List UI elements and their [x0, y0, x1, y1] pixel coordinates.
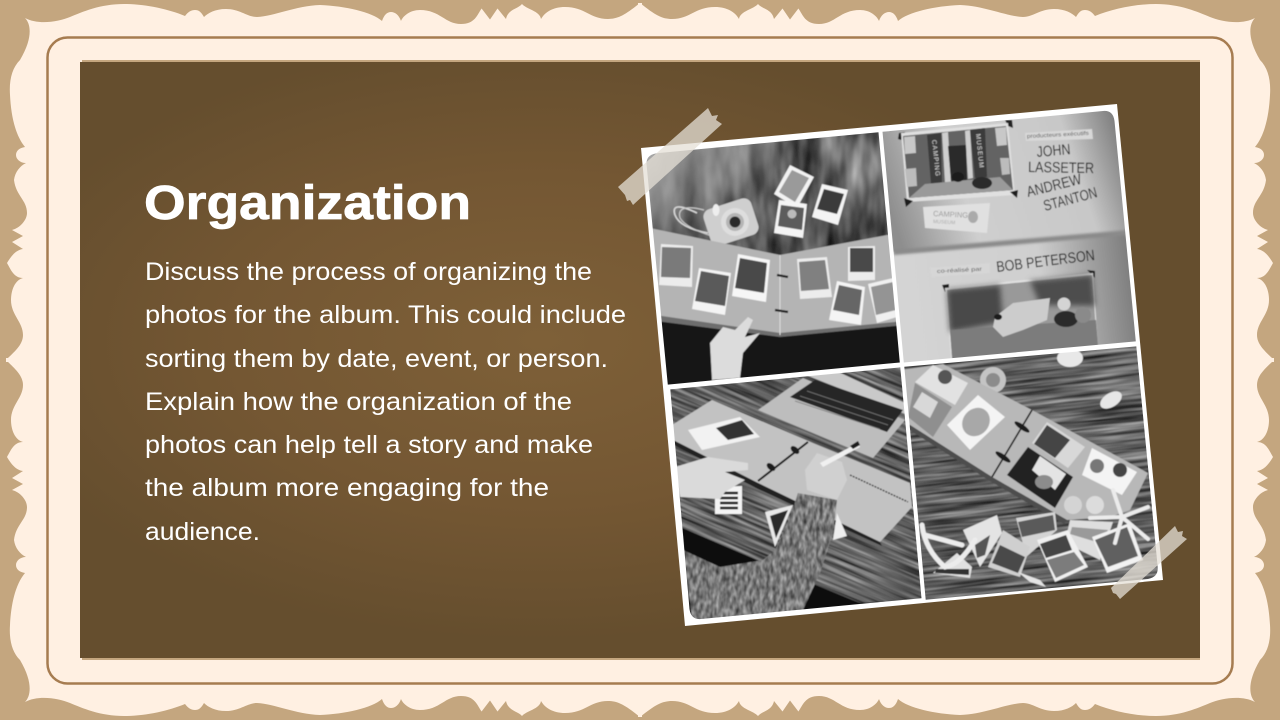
scattered seaside photos [933, 512, 1143, 587]
text block: body copy: sorting them by date, event, or person. [145, 345, 608, 373]
credits: executive producers: JOHN [1036, 141, 1071, 161]
anchor [922, 525, 975, 567]
photo: album with polaroids on fabric [646, 132, 900, 385]
label: camping museum tag: MUSEUM [933, 219, 955, 226]
credits: co-director: co-réalisé par [937, 267, 982, 275]
credits: co-director: BOB PETERSON [995, 247, 1096, 276]
label: camping museum tag [923, 203, 990, 233]
shells [980, 349, 1125, 412]
text block: body copy: Explain how the organization of the [145, 388, 572, 416]
text block: body copy: the album more engaging for the [145, 474, 549, 502]
tape: bottom right [1111, 526, 1187, 599]
credits: executive producers: STANTON [1042, 184, 1099, 215]
tape: top left [618, 108, 722, 205]
photo: open album on wooden table with shells [904, 346, 1158, 600]
credits: executive producers [1025, 129, 1099, 215]
laptop [758, 368, 905, 458]
title: Organization [144, 177, 471, 230]
left hand with card [675, 457, 748, 514]
photo: hands writing in notebook beside laptop [670, 367, 922, 620]
text block: body copy: photos can help tell a story and make [145, 431, 593, 459]
text block: body copy [145, 258, 626, 546]
text block: body copy: audience. [145, 518, 260, 546]
picture: dog and old man running [942, 270, 1098, 358]
photo: film credits scrapbook pages [882, 110, 1136, 362]
credits: co-director [936, 249, 1095, 274]
arm in knit sleeve [684, 440, 860, 620]
starfish [1090, 490, 1148, 543]
picture: museum building [898, 120, 1018, 207]
collage white print [641, 104, 1163, 626]
striped photos on table [765, 505, 847, 547]
credits: executive producers: LASSETER [1028, 159, 1094, 177]
label: camping museum tag: CAMPING [933, 209, 968, 220]
text block: body copy: photos for the album. This could include [145, 301, 626, 329]
photo collage [618, 104, 1187, 626]
open album [900, 364, 1148, 524]
notebook [672, 400, 912, 546]
credits: executive producers: producteurs exécutifs [1027, 131, 1089, 140]
picture: museum building: MUSEUM [974, 133, 985, 169]
credits: executive producers: ANDREW [1025, 171, 1084, 201]
text block: body copy: Discuss the process of organizing the [145, 258, 592, 286]
panel: brown content panel [80, 60, 1200, 660]
picture: museum building: CAMPING [930, 139, 941, 177]
